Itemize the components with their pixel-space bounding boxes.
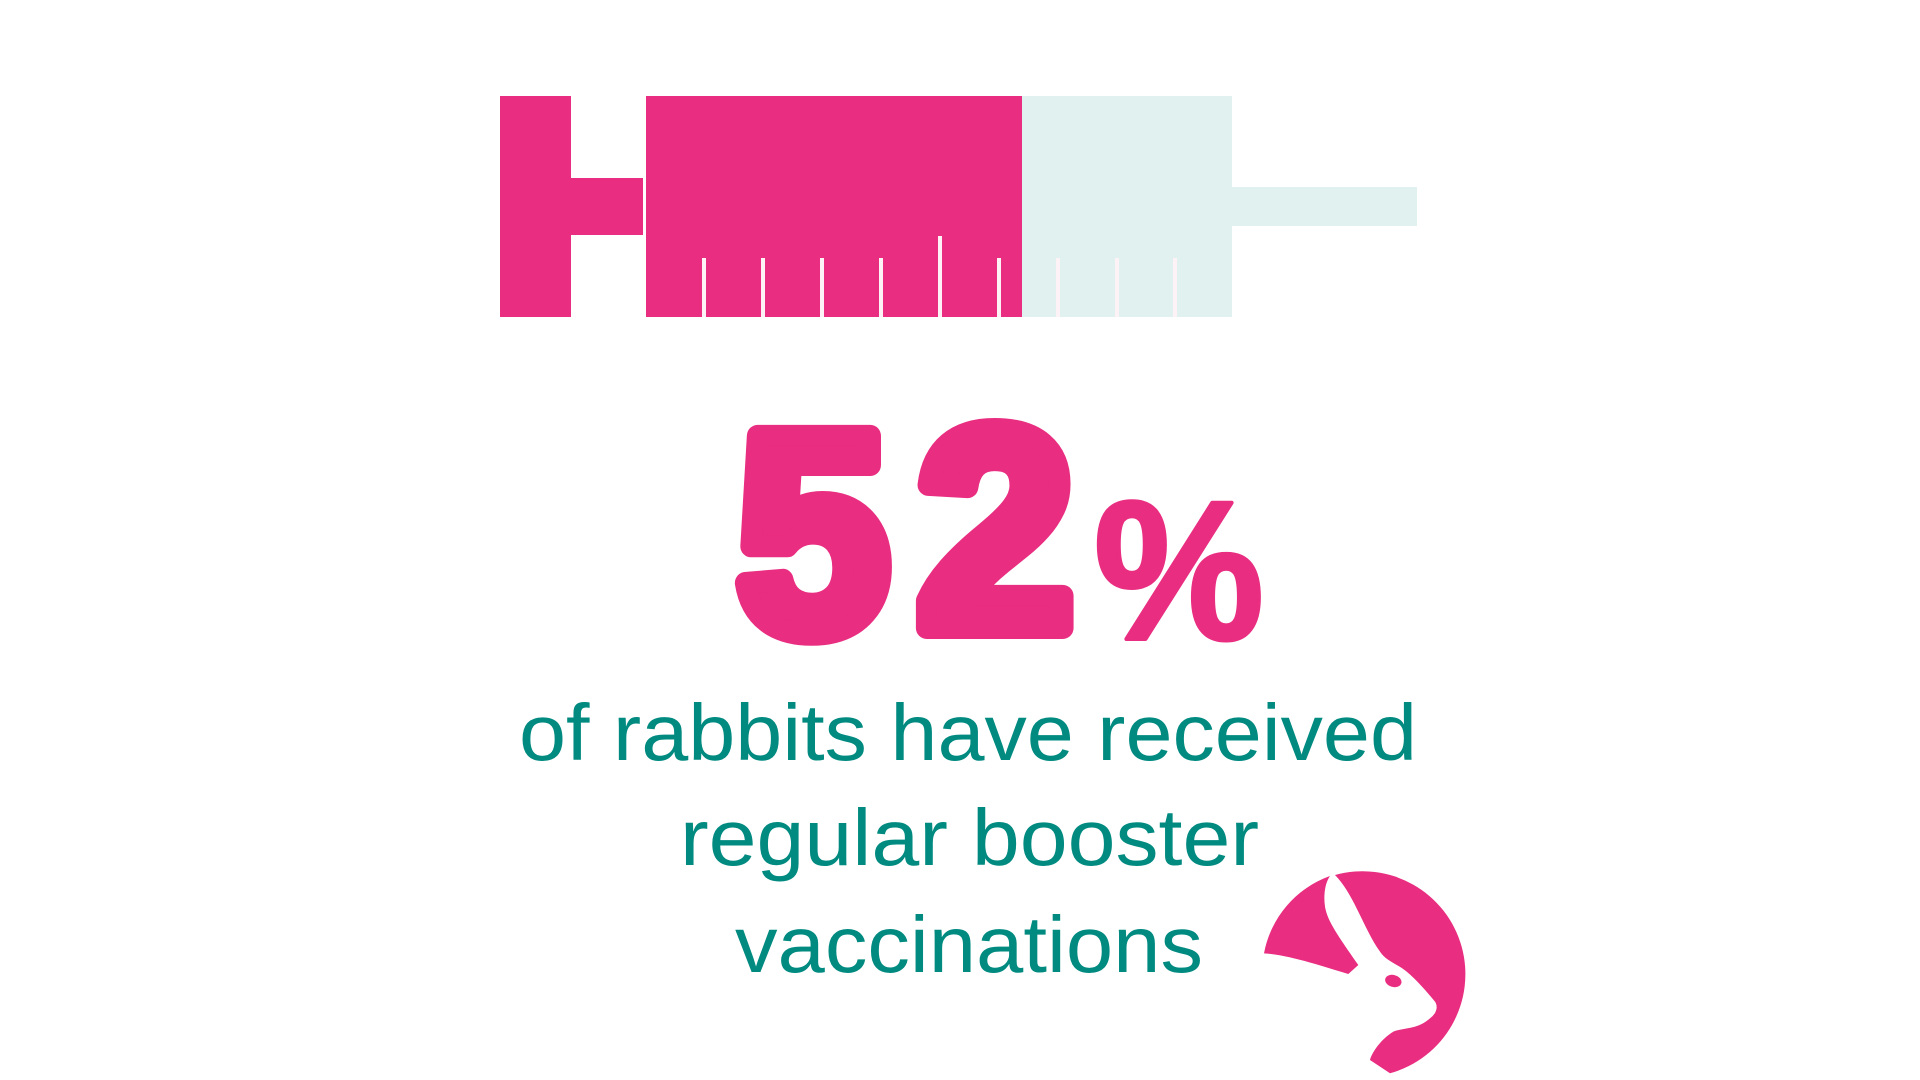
icon: syringe (500, 96, 1417, 317)
syringe tick marks (702, 236, 1177, 317)
description text: of rabbits have received (519, 688, 1417, 777)
icon: rabbit head in circle (1264, 871, 1465, 1073)
syringe barrel filled 52% (646, 96, 1022, 317)
statistic: 52%: 2 (917, 371, 1074, 689)
statistic: 52%: % (1094, 460, 1264, 681)
syringe barrel empty (1022, 96, 1232, 317)
syringe plunger (500, 96, 643, 317)
statistic: 52%: 5 (737, 375, 889, 693)
statistic: 52% (737, 371, 1264, 693)
description text (519, 688, 1417, 989)
syringe needle (1232, 187, 1417, 226)
description text: vaccinations (735, 900, 1203, 989)
description text: regular booster (680, 793, 1259, 882)
